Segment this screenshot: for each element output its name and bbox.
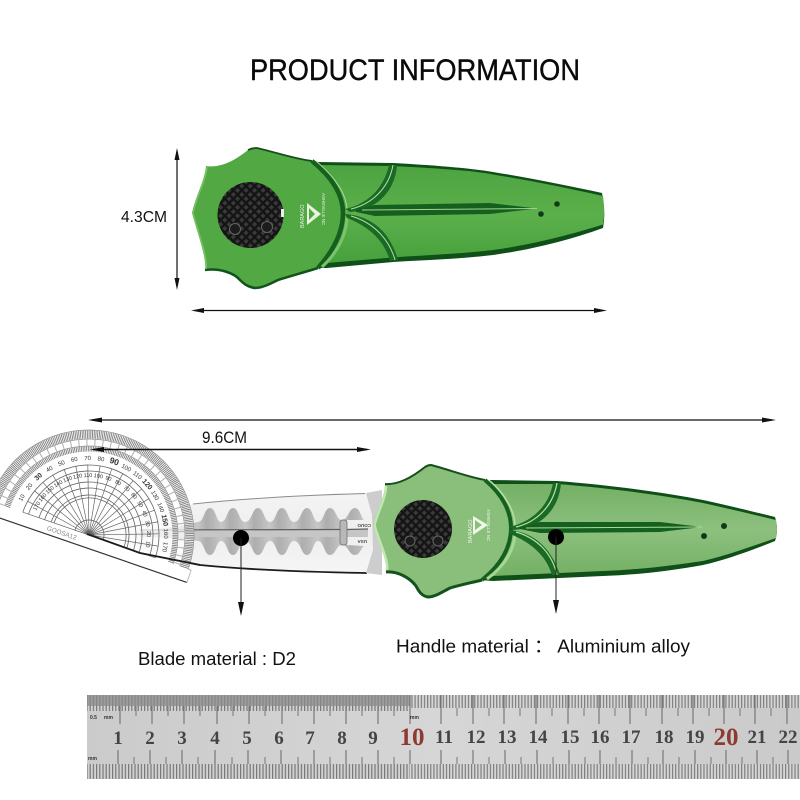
sheath dark edge (480, 480, 777, 581)
outer degree numbers: 10 (18, 493, 27, 503)
outer degree numbers (17, 431, 191, 554)
centimetre numbers: 3 (177, 728, 187, 749)
handle left highlight (374, 486, 387, 570)
centimetre numbers: 17 (622, 727, 641, 748)
inner degree numbers: 30 (143, 520, 150, 527)
central fuller (520, 522, 702, 533)
top mm ticks, left half (87, 706, 410, 711)
outer degree numbers: 80 (97, 456, 105, 464)
outer degree numbers: 90 (108, 455, 121, 468)
upper rib (345, 165, 397, 212)
blade length label: 9.6CM (202, 429, 247, 447)
handle top dark edge (385, 465, 485, 484)
bottom mm ticks (87, 764, 410, 779)
outer degree numbers: 160 (162, 529, 168, 539)
outer degree numbers: 50 (58, 460, 67, 468)
centimetre numbers: 1 (113, 728, 123, 749)
inner degree numbers: 120 (73, 473, 83, 481)
inner degree numbers: 130 (62, 475, 73, 484)
unit marks: 0.5 (90, 715, 97, 721)
blade body (87, 492, 382, 574)
base right end (184, 569, 191, 582)
centimetre numbers: 2 (145, 728, 155, 749)
handle material label: Handle material ： Aluminium alloy (396, 636, 691, 656)
upper rib (509, 483, 561, 530)
inner degree numbers: 50 (135, 500, 144, 509)
centimetre numbers: 16 (590, 727, 610, 748)
inner degree numbers (32, 456, 167, 550)
outer degree numbers: 30 (34, 472, 44, 482)
sheath dark edge (318, 162, 604, 268)
centimetre numbers: 11 (435, 727, 453, 748)
outer degree numbers: 170 (160, 541, 168, 553)
blade pointer (233, 530, 249, 616)
blade engraving: COUO (357, 523, 371, 528)
width dimension arrow, top knife (191, 308, 607, 313)
centimetre numbers: 19 (686, 727, 704, 748)
centimetre numbers: 8 (337, 728, 347, 749)
dark top band, left half (87, 695, 410, 706)
centimetre numbers: 20 (714, 724, 738, 751)
centimetre numbers: 14 (528, 727, 548, 748)
inner degree numbers: 160 (38, 492, 48, 503)
inner degree numbers: 80 (113, 479, 122, 488)
unit marks: mm (410, 715, 419, 721)
blade edge lines (87, 534, 367, 573)
bottom knife blade (87, 490, 382, 575)
inner degree numbers: 110 (84, 473, 92, 479)
logo emblem: ASHEVILLE NC (321, 193, 326, 226)
degree rings (23, 446, 178, 558)
outer degree numbers: 100 (120, 463, 132, 474)
blade edge over protractor (87, 534, 200, 565)
logo emblem (300, 193, 326, 228)
central fuller (356, 203, 537, 216)
centimetre numbers: 5 (242, 728, 252, 749)
centimetre numbers: 12 (466, 727, 486, 748)
base edge (0, 513, 187, 582)
centimetre numbers: 13 (498, 727, 516, 748)
centimetre numbers: 10 (400, 724, 424, 751)
title: PRODUCT INFORMATION (250, 54, 580, 87)
inner graduated ring (8, 426, 198, 563)
outer degree numbers: 40 (45, 465, 55, 474)
inner degree numbers: 100 (93, 473, 103, 480)
handle left highlight (193, 167, 207, 269)
half centimetre ticks (134, 706, 773, 764)
cell dividers (2, 417, 207, 565)
logo emblem (468, 509, 491, 543)
unit marks (88, 715, 419, 762)
centimetre numbers: 6 (274, 728, 284, 749)
thumb button (218, 182, 284, 248)
handle bottom dark edge (386, 572, 482, 597)
outer degree numbers: 60 (71, 457, 79, 464)
sheath body (320, 165, 604, 264)
long centimetre ticks (118, 695, 788, 764)
top knife, closed view (192, 148, 604, 288)
base mark: GOOSA12 (46, 525, 78, 542)
overall length arrow (88, 418, 776, 422)
sheath body (492, 484, 777, 576)
handle body (373, 465, 511, 597)
inner degree numbers: 70 (122, 485, 130, 493)
outer degree numbers: 20 (26, 482, 35, 492)
blade length arrow (90, 447, 371, 452)
outer degree numbers: 150 (160, 514, 169, 527)
inner degree numbers: 140 (53, 479, 64, 489)
handle pointer (548, 529, 564, 614)
bottom knife handle (373, 465, 777, 597)
blade engraving: USA (357, 539, 367, 544)
ruler body (87, 695, 800, 779)
thumb button (394, 500, 452, 558)
height dimension arrow (174, 148, 180, 290)
centimetre numbers: 21 (748, 727, 766, 748)
ricasso (366, 490, 382, 575)
centimetre numbers: 22 (778, 727, 798, 748)
outer degree numbers: 120 (140, 478, 153, 492)
handle bottom dark edge (205, 268, 318, 288)
central channel (140, 530, 368, 537)
centimetre numbers: 4 (210, 728, 220, 749)
inner degree numbers: 20 (145, 531, 151, 537)
outer degree numbers: 130 (149, 490, 160, 502)
lower rib (509, 530, 560, 575)
serrated lower fuller (140, 536, 364, 555)
outer degree numbers: 70 (84, 456, 92, 462)
centimetre numbers: 7 (305, 728, 315, 749)
logo emblem: BARAGO (468, 519, 474, 543)
protractor (0, 402, 225, 582)
protractor plate (0, 402, 225, 582)
inner degree numbers: 40 (140, 510, 148, 518)
outer degree numbers: 110 (131, 471, 143, 482)
unit marks: mm (88, 756, 97, 762)
handle top dark edge (248, 148, 312, 161)
centimetre numbers (113, 724, 798, 751)
handle collar arc (312, 161, 343, 268)
inner degree numbers: 170 (33, 501, 42, 512)
centimetre numbers: 18 (654, 727, 674, 748)
serrated upper fuller (140, 508, 364, 534)
inner degree numbers: 90 (104, 475, 112, 483)
logo emblem: BARAGO (300, 204, 306, 228)
outer graduated ring (0, 407, 217, 568)
blade material label: Blade material : D2 (138, 648, 296, 669)
centimetre numbers: 9 (368, 728, 378, 749)
height label: 4.3CM (121, 209, 167, 226)
T mark (340, 520, 347, 545)
centimetre numbers: 15 (560, 727, 580, 748)
outer degree numbers: 140 (155, 502, 165, 514)
handle collar arc (482, 480, 511, 580)
handle body (192, 148, 343, 288)
inner degree numbers: 60 (129, 492, 138, 501)
logo emblem: ASHEVILLE NC (486, 509, 491, 542)
radial lines (23, 446, 178, 558)
inner degree numbers: 150 (45, 485, 56, 496)
unit marks: mm (104, 715, 113, 721)
blade engraving (357, 523, 371, 544)
lower rib (345, 214, 398, 261)
outer ring border (0, 402, 222, 569)
steel ruler (87, 695, 800, 779)
inner degree numbers: 10 (144, 541, 151, 548)
sheath holes (538, 211, 544, 217)
sheath holes (701, 533, 707, 539)
top ticks, right half (410, 695, 800, 708)
